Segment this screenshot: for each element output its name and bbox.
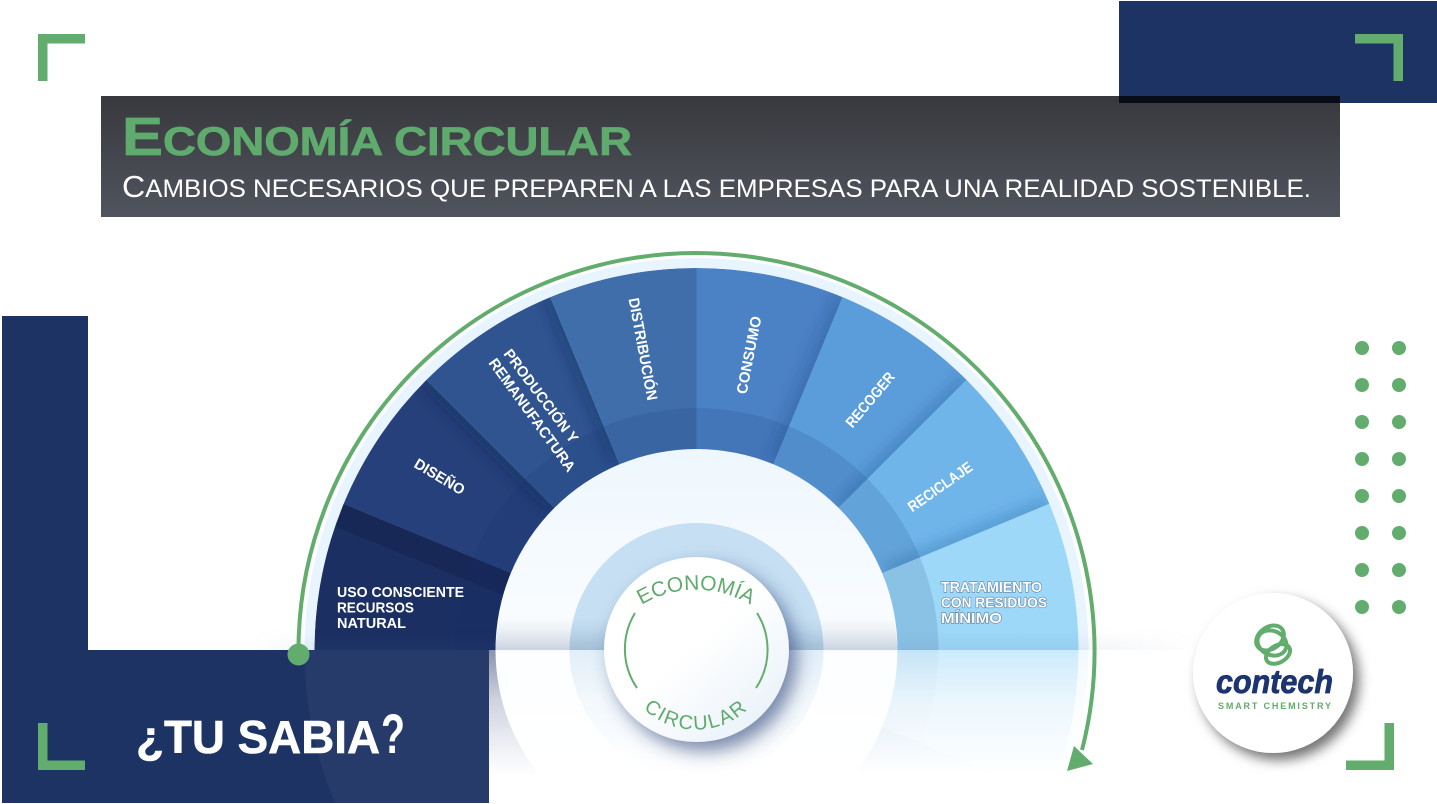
arrowhead: [1067, 746, 1093, 771]
panel: reflection tint on navy: [304, 650, 489, 803]
center circle: [598, 554, 810, 764]
label: producción y remanufactura: REMANUFACTURA: [485, 355, 579, 475]
subtitle: CAMBIOS NECESARIOS QUE PREPAREN A LAS EMPRESAS PARA UNA REALIDAD SOSTENIBLE.: [122, 169, 1311, 204]
header panel: [101, 96, 1340, 217]
label: uso consciente: USO CONSCIENTE: [337, 584, 464, 601]
title: ECONOMÍA CIRCULAR: [122, 107, 632, 167]
label: uso consciente: RECURSOS: [337, 600, 414, 616]
corner bracket top left: [38, 34, 85, 81]
green arrow arc: [288, 253, 1094, 771]
label: tratamiento: MÍNIMO: [941, 610, 1002, 627]
dots grid: [1355, 341, 1406, 614]
center label bottom: CIRCULAR: [646, 700, 747, 730]
corner bracket bottom right: [1346, 723, 1394, 770]
label: recoger: RECOGER: [843, 369, 899, 431]
label: uso consciente: NATURAL: [337, 615, 406, 632]
logo wordmark: contech: [1216, 663, 1333, 700]
logo tagline: SMART CHEMISTRY: [1218, 701, 1331, 711]
label: distribución: DISTRIBUCIÓN: [625, 296, 661, 402]
shading on inner disc: [496, 618, 898, 650]
label: reciclaje: RECICLAJE: [905, 459, 976, 516]
panel: navy left block: [2, 316, 489, 803]
label: tratamiento: TRATAMIENTO: [941, 579, 1042, 596]
corner bracket top right: [1355, 34, 1403, 81]
label: tratamiento: CON RESIDUOS: [941, 594, 1047, 612]
panel: navy top right block: [1119, 1, 1437, 103]
label: consumo: CONSUMO: [734, 314, 766, 396]
label: uso consciente: [337, 584, 464, 632]
corner bracket bottom left: [38, 723, 85, 770]
wheel reflection: [489, 650, 1088, 762]
logo badge: [1193, 593, 1353, 753]
label: producción y remanufactura: PRODUCCIÓN Y: [500, 345, 582, 447]
label: tratamiento: [941, 579, 1047, 627]
call to action: tu sabia: ¿TU SABIA: [136, 711, 380, 763]
center right arc: [756, 613, 768, 688]
arc start dot: [288, 644, 310, 666]
center label top: ECONOMÍA: [636, 575, 752, 604]
label: diseño: DISEÑO: [411, 455, 468, 499]
center left arc: [625, 613, 637, 688]
shading at the reflection horizon: [288, 642, 1129, 650]
semicircular wheel: [304, 258, 1088, 650]
logo rings icon: [1251, 620, 1294, 668]
call to action: tu sabia: ?: [381, 702, 405, 765]
